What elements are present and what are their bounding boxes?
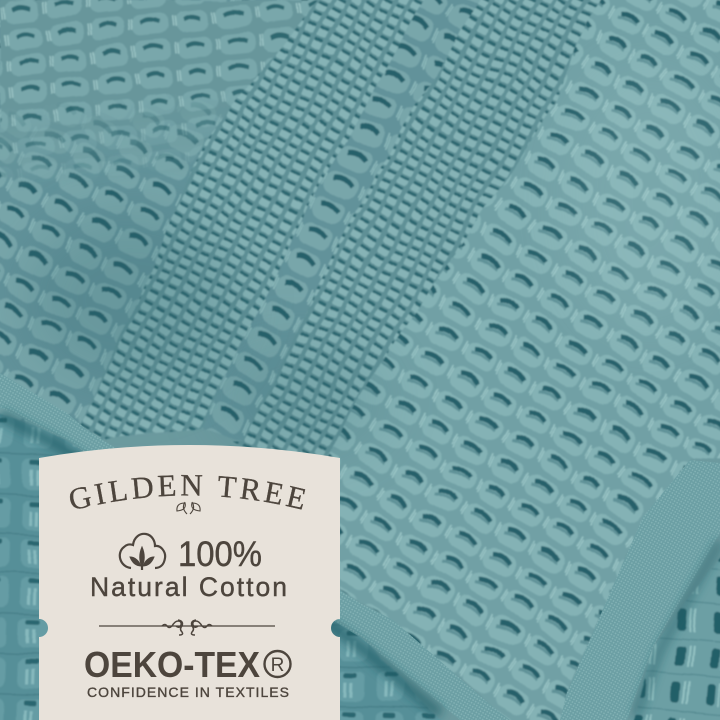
fold shadow under lower hem bbox=[0, 415, 440, 714]
fabric: upper-left flatter cells bbox=[0, 0, 318, 180]
shading on fabric bbox=[20, 60, 720, 460]
icon: cotton boll bbox=[120, 534, 165, 570]
fabric: top-left waffle cells bbox=[0, 0, 335, 440]
fold shadow under right hem bbox=[636, 542, 720, 716]
fabric: towel underneath, right corner bbox=[627, 533, 720, 720]
tagline: CONFIDENCE IN TEXTILES bbox=[87, 684, 289, 700]
fabric: right hem bbox=[560, 460, 720, 720]
brand name: GILDEN TREE bbox=[70, 474, 306, 510]
OEKO-TEX logo: R bbox=[271, 655, 284, 676]
OEKO-TEX logo: OEKO-TEX bbox=[84, 644, 260, 685]
100%: 100% bbox=[178, 535, 262, 574]
fabric: main waffle panel bbox=[320, 0, 720, 720]
label tag bbox=[39, 445, 340, 720]
divider with flourish bbox=[99, 620, 275, 635]
fabric: first small-cell band bbox=[70, 0, 436, 440]
fabric: towel underneath, left bbox=[0, 407, 460, 720]
fabric: second small-cell band bbox=[230, 0, 610, 480]
Natural Cotton: Natural Cotton bbox=[90, 572, 287, 602]
icon: brand ornament bbox=[177, 502, 200, 514]
fabric: lower hem bbox=[0, 373, 510, 720]
fabric: large-cell strip between bands bbox=[200, 0, 490, 440]
label background bbox=[39, 445, 340, 720]
